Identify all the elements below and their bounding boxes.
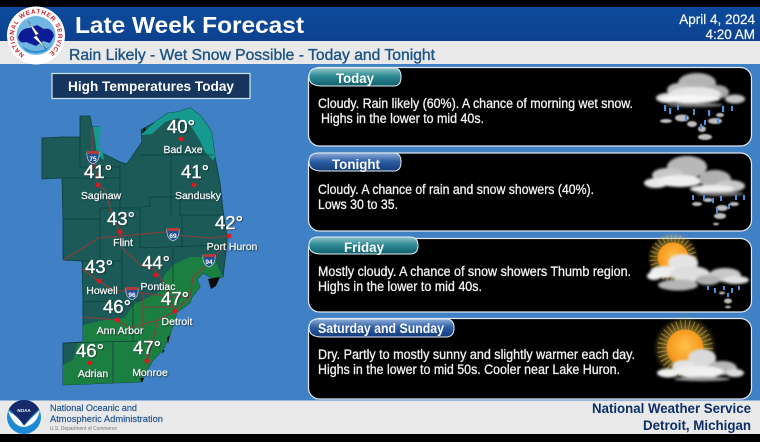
forecast text: today [318,96,633,126]
forecast text: friday [318,264,631,294]
forecast text: saturday and sunday: Highs in the lower to mid 50s. Cooler near Lake Huron. [318,362,620,377]
city names: Flint [113,237,133,249]
tab: friday [309,237,418,255]
forecast text: today: Highs in the lower to mid 40s. [321,111,484,126]
city names [78,144,258,380]
subtitle bar: Rain Likely - Wet Snow Possible - Today and Tonight [69,47,436,64]
map: southeast Michigan high temperatures [42,108,258,385]
title: Late Week Forecast [75,12,304,38]
office name [592,401,751,433]
shield I-75: 75 [89,156,97,163]
county base [42,108,227,385]
temperature values: 41° [84,161,112,182]
subtitle bar [0,41,760,64]
tab: friday: Friday [344,239,384,255]
tab: today: Today [336,70,374,86]
interstate shields [87,151,215,300]
tab: tonight [309,153,401,172]
date and time [679,12,755,42]
green warmer zone [63,257,223,385]
panel: today [308,68,752,146]
city names: Port Huron [207,241,258,253]
department line: U.S. Department of Commerce [50,426,117,432]
city names: Sandusky [175,190,222,202]
date and time: April 4, 2024 [679,12,755,27]
icon: rain and snow cloud [656,73,745,140]
Lake St. Clair and shore marks [140,127,220,383]
city names: Adrian [78,368,108,380]
temperature values: 42° [215,212,243,233]
temperature values: 44° [142,252,170,273]
tab: tonight: Tonight [332,156,380,172]
NOAA name: National Oceanic and [50,403,137,413]
temperature values: 43° [85,256,113,277]
temperature values: 41° [181,161,209,182]
temperature values: 47° [133,337,161,358]
county lines [62,137,223,383]
temperature values [76,116,243,361]
city names: Detroit [162,316,193,328]
temperature values: 46° [103,296,131,317]
map heading box [52,74,250,98]
city names: Ann Arbor [97,325,144,337]
forecast text: saturday and sunday [318,347,635,377]
shield I-94 [203,254,215,267]
forecast text: today: Cloudy. Rain likely (60%). A chance of morning wet snow. [318,96,633,111]
city names: Howell [86,285,118,297]
panel: saturday and sunday [308,316,752,399]
header banner [0,7,760,42]
NOAA name [50,403,163,424]
tab: saturday and sunday: Saturday and Sunday [318,321,444,336]
city names: Pontiac [140,281,176,293]
teal shoreline zone [93,108,215,160]
forecast text: tonight [318,182,594,212]
panel: friday [308,232,752,312]
forecast text: saturday and sunday: Dry. Partly to mostly sunny and slightly warmer each day. [318,347,635,362]
highways [63,127,229,361]
icon: rain and snow clouds [644,156,745,225]
temperature values: 47° [161,288,189,309]
city markers [88,137,231,365]
icon: NOAA logo: NOAA [17,408,31,413]
temperature values: 40° [167,116,195,137]
tab: today [309,68,401,86]
bottom black band [0,434,760,442]
city names: Monroe [132,367,168,379]
date and time: 4:20 AM [705,27,755,42]
temperature values: 43° [107,208,135,229]
icon: NOAA logo [7,400,41,434]
icon: sun behind cloud with snow [647,232,749,308]
office name: National Weather Service [592,401,751,416]
shield I-96 [126,287,138,300]
icon: sun behind cloud [653,316,744,381]
forecast text: friday: Mostly cloudy. A chance of snow showers Thumb region. [318,264,631,279]
forecast text: tonight: Lows 30 to 35. [318,197,398,212]
shield I-94: 94 [205,259,213,266]
temperature values: 46° [76,340,104,361]
top black band [0,0,760,7]
city names: Bad Axe [163,144,203,156]
city names: Saginaw [81,190,122,202]
panel: tonight [308,153,752,231]
shield I-96: 96 [128,292,136,299]
NOAA name: Atmospheric Administration [50,414,163,424]
shield I-75 [87,151,99,164]
office name: Detroit, Michigan [643,418,751,433]
icon: NWS logo: NATIONAL WEATHER SERVICE [10,9,62,58]
map heading box: High Temperatures Today [68,78,234,94]
forecast text: tonight: Cloudy. A chance of rain and snow showers (40%). [318,182,594,197]
forecast text: friday: Highs in the lower to mid 40s. [318,279,482,294]
shield I-69: 69 [169,233,177,240]
shield I-69 [167,228,179,241]
footer [0,400,760,434]
